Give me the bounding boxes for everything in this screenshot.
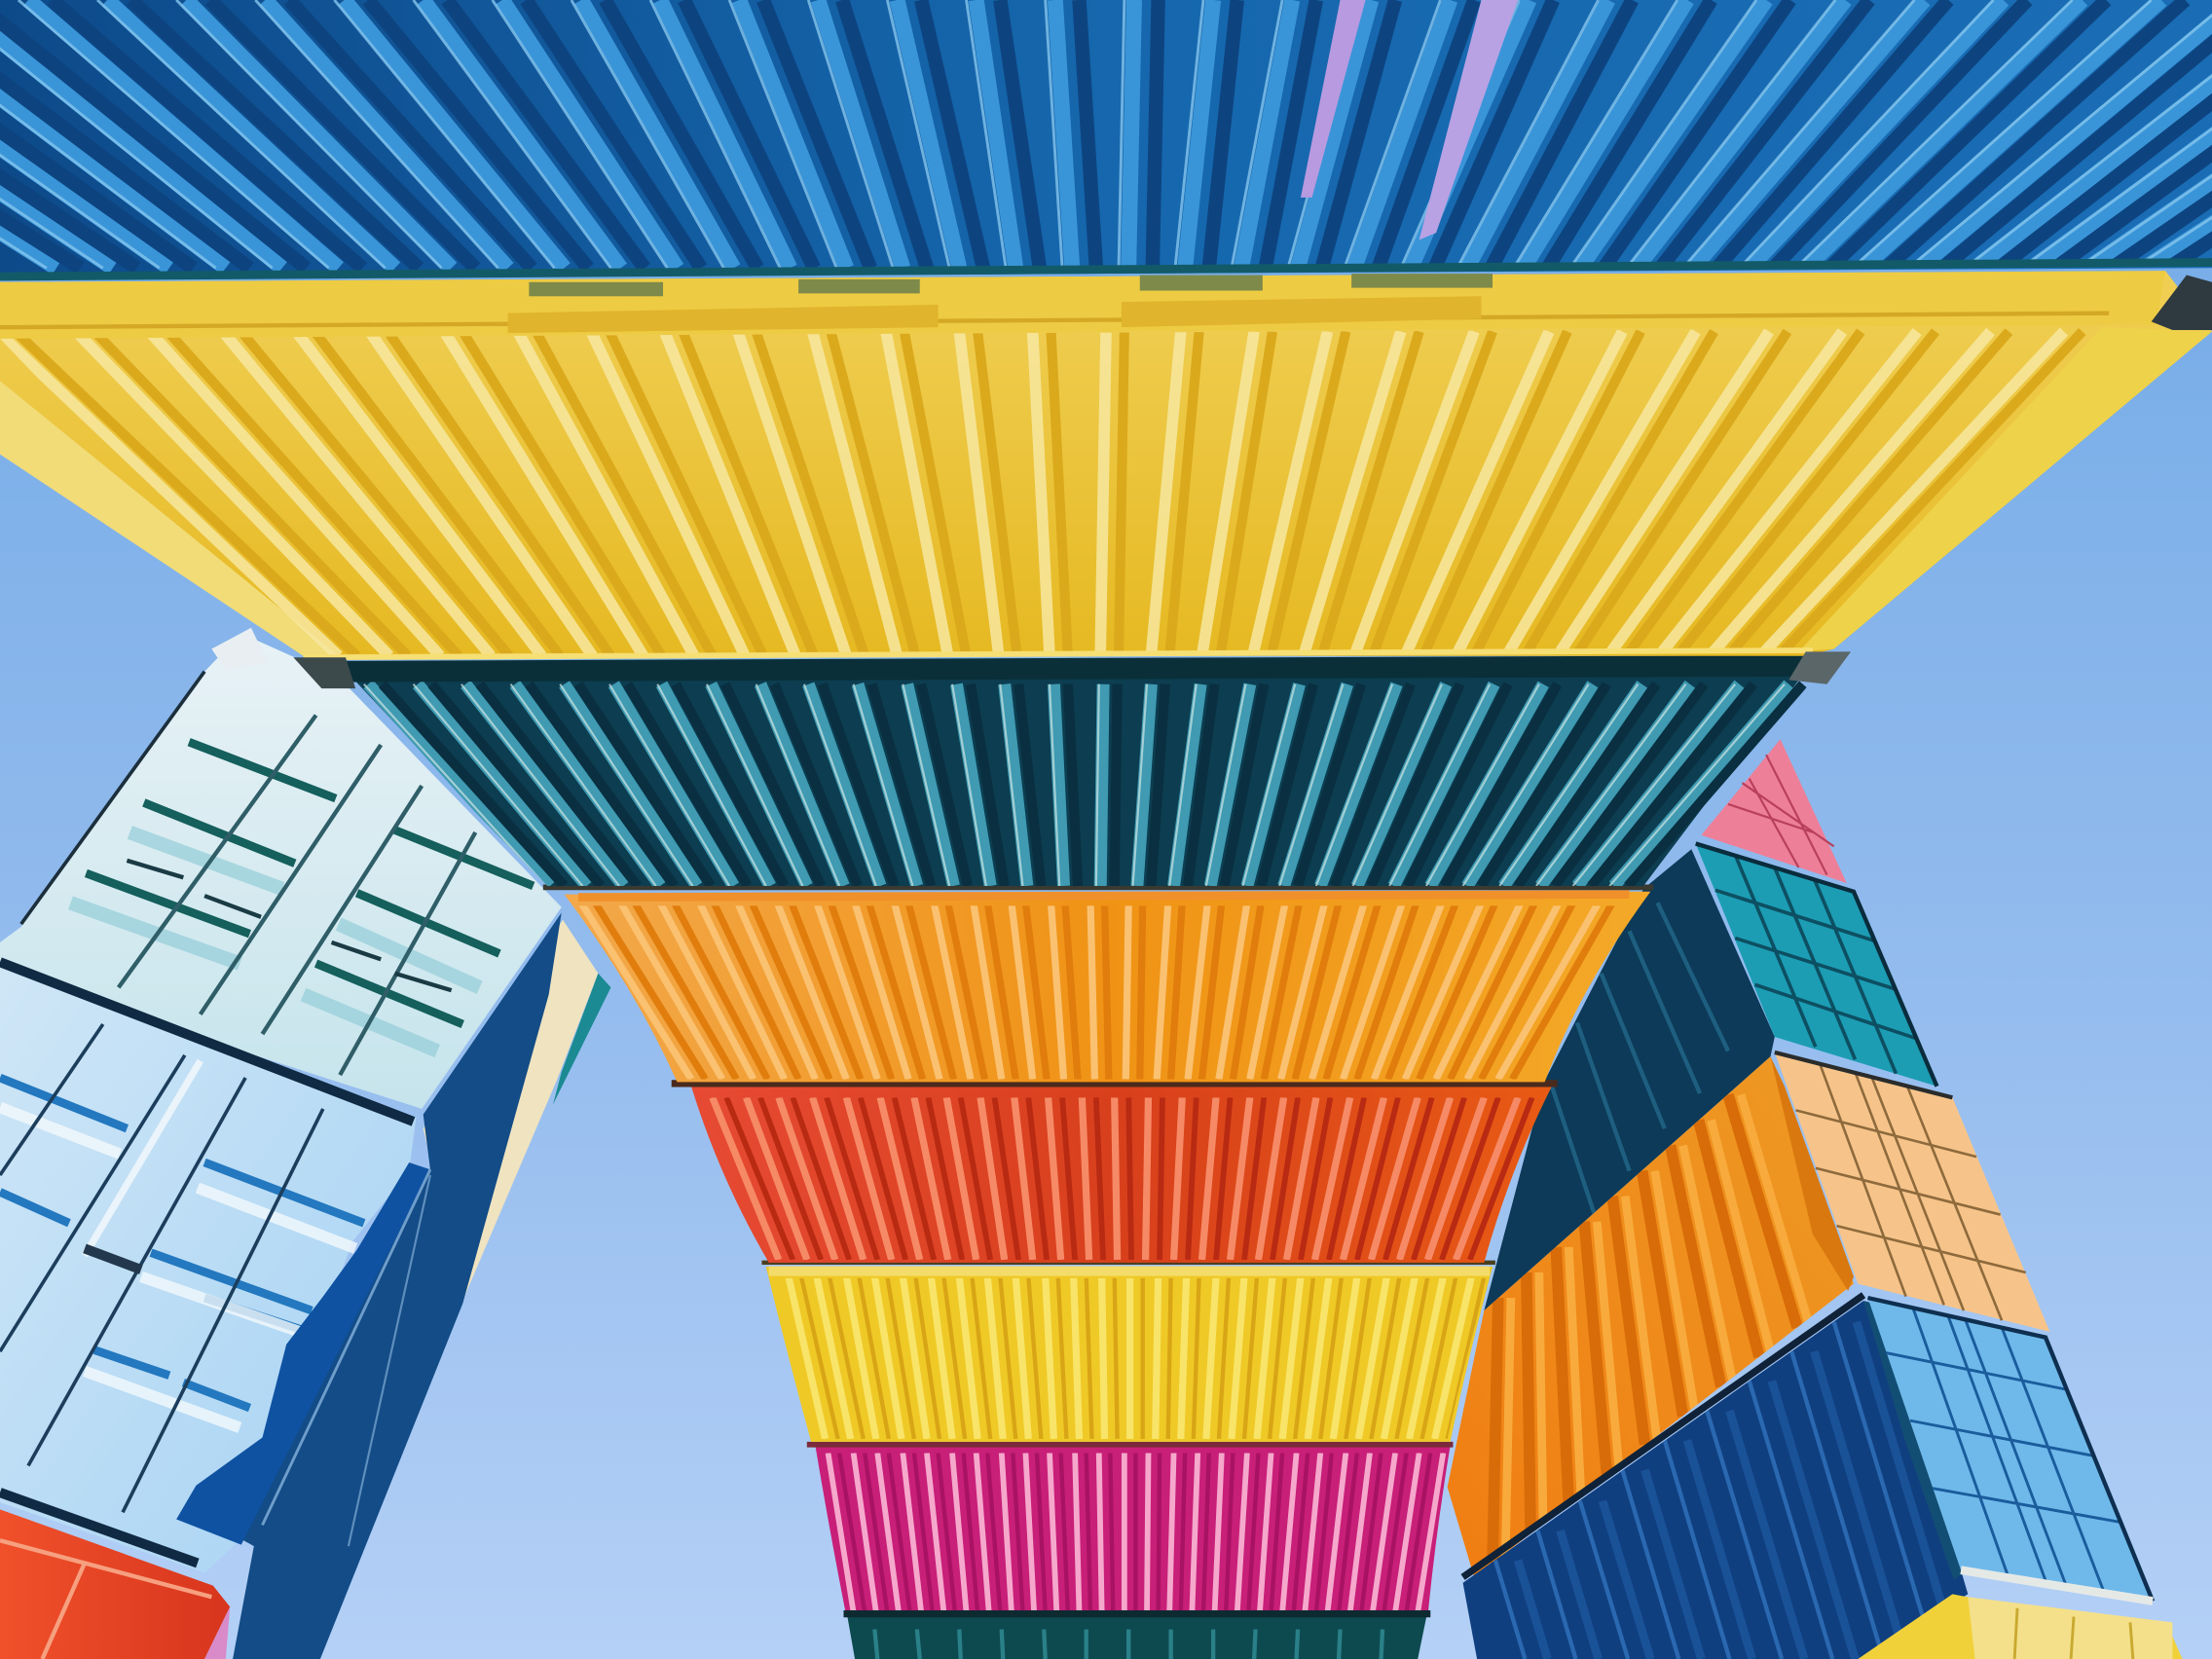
left container tower bbox=[0, 628, 610, 1659]
lower light door face bbox=[0, 962, 416, 1573]
red container at bottom left bbox=[0, 1509, 230, 1659]
navy lower container side bbox=[1463, 1295, 1968, 1659]
container column: dark teal bottom bbox=[843, 1611, 1430, 1659]
container column: magenta bbox=[807, 1445, 1455, 1617]
yellow container wide underside bbox=[0, 271, 2212, 657]
light blue door face bbox=[1867, 1298, 2153, 1602]
corner casting at top right bbox=[2152, 276, 2212, 330]
right container tower bbox=[1448, 739, 2183, 1659]
cream and teal container side bbox=[424, 920, 610, 1301]
corner casting at middle right bbox=[1788, 651, 1851, 684]
container column: dark teal upper bbox=[339, 656, 1817, 886]
dark blue container side bbox=[176, 912, 562, 1659]
container column: red bbox=[672, 1084, 1558, 1263]
orange container side bbox=[1448, 1056, 1854, 1577]
yellow top frame rail bbox=[0, 271, 2165, 339]
container column: orange bbox=[543, 887, 1653, 1082]
pink door face bbox=[1701, 739, 1847, 883]
upper light door face bbox=[0, 628, 562, 1109]
dark seams between left containers bbox=[0, 962, 414, 1563]
corner casting at middle left bbox=[293, 657, 355, 688]
container column: yellow bbox=[761, 1263, 1495, 1442]
blue container at the top bbox=[0, 0, 2212, 279]
purple sky reflections bbox=[1301, 0, 1518, 240]
yellow container at bottom right bbox=[1858, 1570, 2183, 1659]
peach door face bbox=[1775, 1052, 2049, 1332]
navy upper container side bbox=[1484, 849, 1775, 1310]
teal door face bbox=[1696, 843, 1936, 1087]
